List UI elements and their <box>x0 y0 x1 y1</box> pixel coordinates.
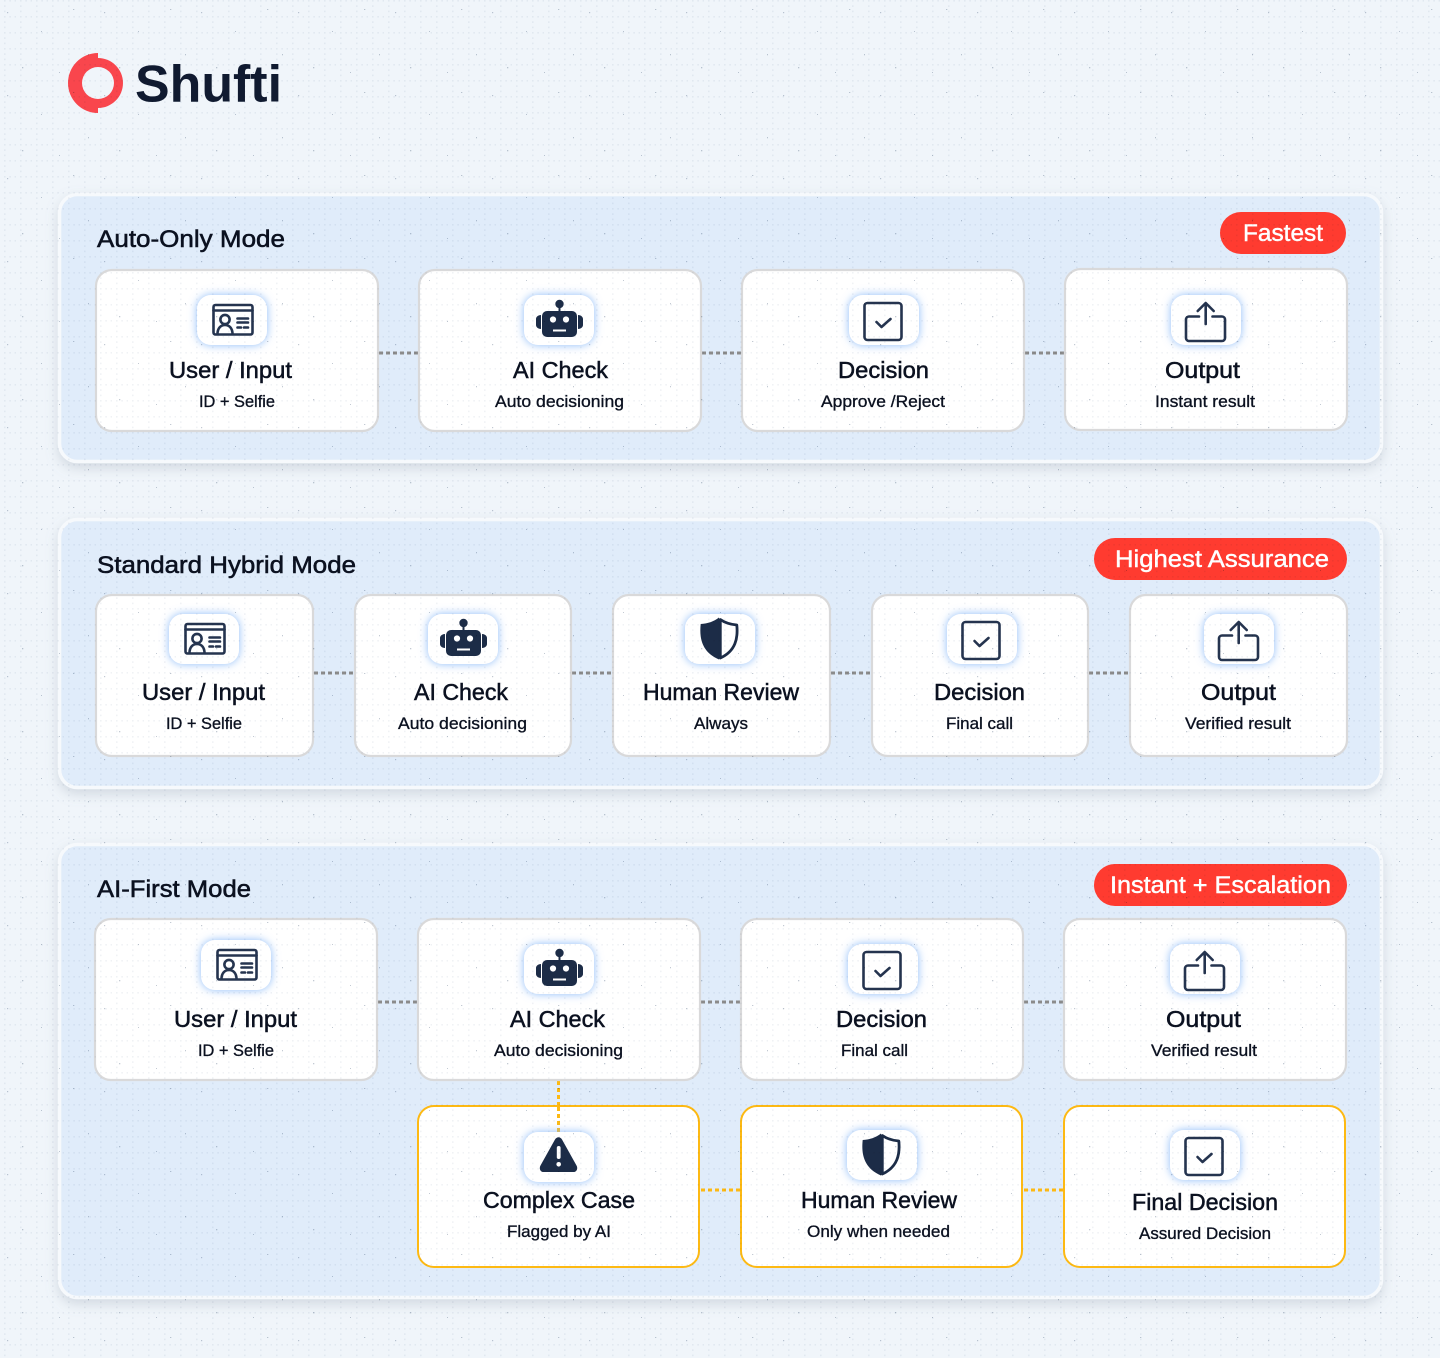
card: AI Check: AI Check <box>510 1006 605 1032</box>
card: AI Check <box>418 919 700 1080</box>
card: User / Input: ID + Selfie <box>166 715 242 733</box>
badge: Fastest <box>1220 212 1346 254</box>
heading: Standard Hybrid Mode: Standard Hybrid Mode <box>97 552 356 579</box>
card: User / Input: ID + Selfie <box>199 393 275 411</box>
card: Output <box>1130 595 1347 756</box>
badge: Instant + Escalation <box>1094 864 1347 906</box>
card: User / Input <box>95 919 377 1080</box>
card: Output: Output <box>1201 679 1277 705</box>
card: Human Review: Always <box>694 715 748 733</box>
card: Decision: Final call <box>946 715 1013 733</box>
card: AI Check: Auto decisioning <box>494 1042 623 1060</box>
card: User / Input <box>96 270 378 431</box>
badge: Highest Assurance: Highest Assurance <box>1115 546 1329 573</box>
card: Output: Verified result <box>1151 1042 1257 1060</box>
logo: Shufti <box>68 53 282 114</box>
badge: Instant + Escalation: Instant + Escalation <box>1110 872 1331 899</box>
card: User / Input: ID + Selfie <box>198 1042 274 1060</box>
badge: Fastest: Fastest <box>1243 220 1323 247</box>
card: User / Input: User / Input <box>169 357 293 383</box>
card: Human Review <box>741 1106 1022 1267</box>
card: Decision: Decision <box>836 1006 927 1032</box>
card: Complex Case: Complex Case <box>483 1187 635 1213</box>
panel: Standard Hybrid Mode <box>60 520 1382 788</box>
card: Human Review <box>613 595 830 756</box>
card: Output: Output <box>1166 1006 1242 1032</box>
heading: Auto-Only Mode: Auto-Only Mode <box>97 226 285 253</box>
card: Output: Verified result <box>1185 715 1291 733</box>
card: Final Decision: Assured Decision <box>1139 1225 1271 1243</box>
card: Decision: Approve /Reject <box>821 393 945 411</box>
card: Output <box>1064 919 1346 1080</box>
card: Human Review: Human Review <box>643 679 799 705</box>
icon: logo ring <box>68 53 123 113</box>
card: AI Check <box>355 595 571 756</box>
heading: AI-First Mode: AI-First Mode <box>97 876 251 903</box>
card: Decision <box>872 595 1088 756</box>
connectors <box>379 352 1064 354</box>
card: Output: Output <box>1165 357 1241 383</box>
logo wordmark: Shufti <box>135 56 282 114</box>
card: User / Input: User / Input <box>142 679 266 705</box>
card: Decision <box>741 919 1023 1080</box>
badge: Highest Assurance <box>1094 538 1347 580</box>
card: AI Check: Auto decisioning <box>398 715 527 733</box>
card: Output <box>1065 269 1347 430</box>
connectors <box>314 672 1129 674</box>
connectors: standard path <box>378 1000 1063 1004</box>
card: Decision: Decision <box>934 679 1025 705</box>
card: User / Input: User / Input <box>174 1006 298 1032</box>
card: AI Check: AI Check <box>414 679 508 705</box>
card: Output: Instant result <box>1155 393 1255 411</box>
card: Decision: Decision <box>838 357 929 383</box>
card: Final Decision <box>1064 1106 1345 1267</box>
card: AI Check: Auto decisioning <box>495 393 624 411</box>
card: Complex Case: Flagged by AI <box>507 1223 611 1241</box>
card: Decision <box>742 270 1024 431</box>
card: Complex Case <box>418 1106 699 1267</box>
card: AI Check <box>419 270 701 431</box>
card: Decision: Final call <box>841 1042 908 1060</box>
card: Human Review: Human Review <box>801 1187 957 1213</box>
card: User / Input <box>96 595 313 756</box>
card: Final Decision: Final Decision <box>1132 1189 1278 1215</box>
card: Human Review: Only when needed <box>807 1223 950 1241</box>
card: AI Check: AI Check <box>513 357 608 383</box>
connectors: escalation path <box>558 1081 1063 1190</box>
panel: AI-First Mode <box>60 844 1382 1298</box>
panel: Auto-Only Mode <box>60 194 1382 462</box>
